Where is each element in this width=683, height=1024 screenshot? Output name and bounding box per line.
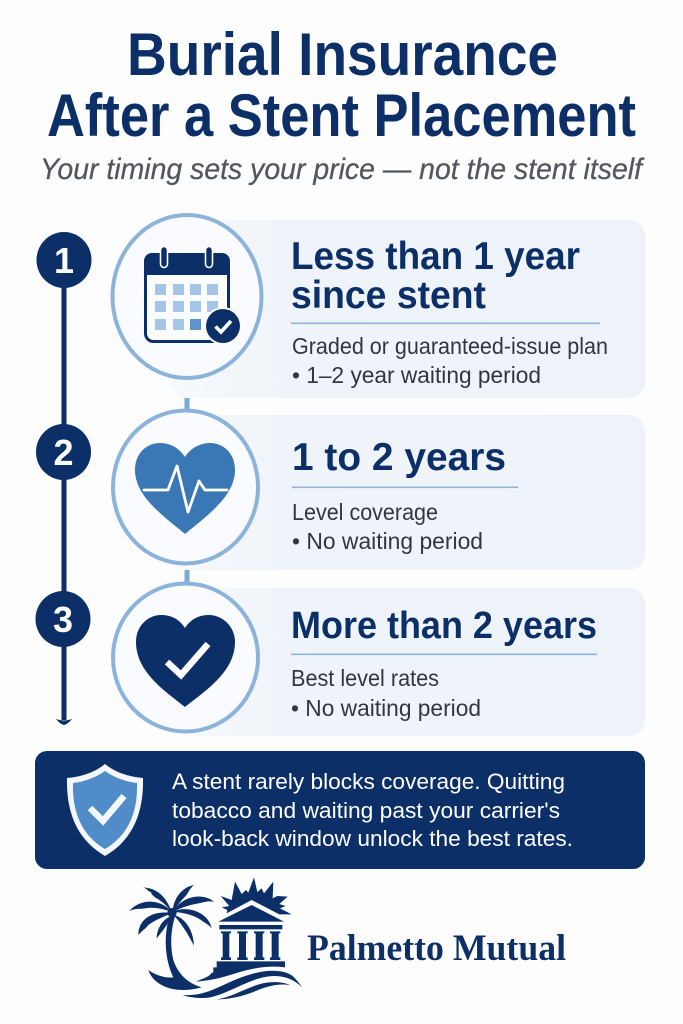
heading: 1 to 2 years: 1 to 2 years (292, 436, 506, 479)
panel: less than 1 year (170, 220, 645, 398)
icon: heart with pulse (113, 410, 258, 564)
step number 2: 2 (53, 432, 74, 473)
heading: more than 2 years: More than 2 years (291, 605, 597, 647)
callout text: look-back window unlock the best rates. (172, 826, 573, 851)
details: less than 1 year: • 1–2 year waiting period (292, 362, 541, 388)
step number 1: 1 (54, 240, 74, 281)
icon: heart with check (113, 584, 258, 732)
heading: less than 1 year: Less than 1 year (291, 235, 580, 278)
details: 1 to 2 years: • No waiting period (292, 528, 483, 554)
timeline line with arrow (56, 260, 72, 725)
step number 3 (36, 591, 90, 647)
step number 3: 3 (53, 599, 73, 640)
step number 1 (36, 232, 92, 288)
details: less than 1 year (292, 333, 608, 388)
callout text: tobacco and waiting past your carrier's (172, 798, 560, 823)
details: more than 2 years: • No waiting period (291, 695, 481, 721)
callout text: A stent rarely blocks coverage. Quitting (172, 769, 565, 794)
logo wordmark: Palmetto Mutual (307, 928, 566, 969)
icon: calendar with check (112, 215, 262, 378)
connectors between circles (184, 376, 190, 586)
heading: less than 1 year (291, 235, 580, 317)
title: Burial Insurance (127, 21, 558, 88)
logo: Palmetto Mutual (129, 877, 566, 999)
callout banner (35, 751, 645, 869)
panel: more than 2 years (170, 588, 645, 736)
logo mark: palm, temple, sun and waves (129, 877, 302, 999)
details: less than 1 year: Graded or guaranteed-issue plan (292, 333, 608, 359)
icon: shield with check (67, 764, 143, 856)
details: 1 to 2 years: Level coverage (292, 499, 438, 525)
title (47, 21, 636, 149)
step number 2 (36, 424, 91, 480)
details: more than 2 years: Best level rates (291, 665, 439, 691)
panel: 1 to 2 years (170, 415, 645, 570)
details: 1 to 2 years (292, 499, 483, 554)
heading: less than 1 year: since stent (291, 274, 486, 317)
subtitle: Your timing sets your price — not the stent itself (40, 153, 645, 186)
callout text (172, 769, 573, 851)
details: more than 2 years (291, 665, 481, 721)
